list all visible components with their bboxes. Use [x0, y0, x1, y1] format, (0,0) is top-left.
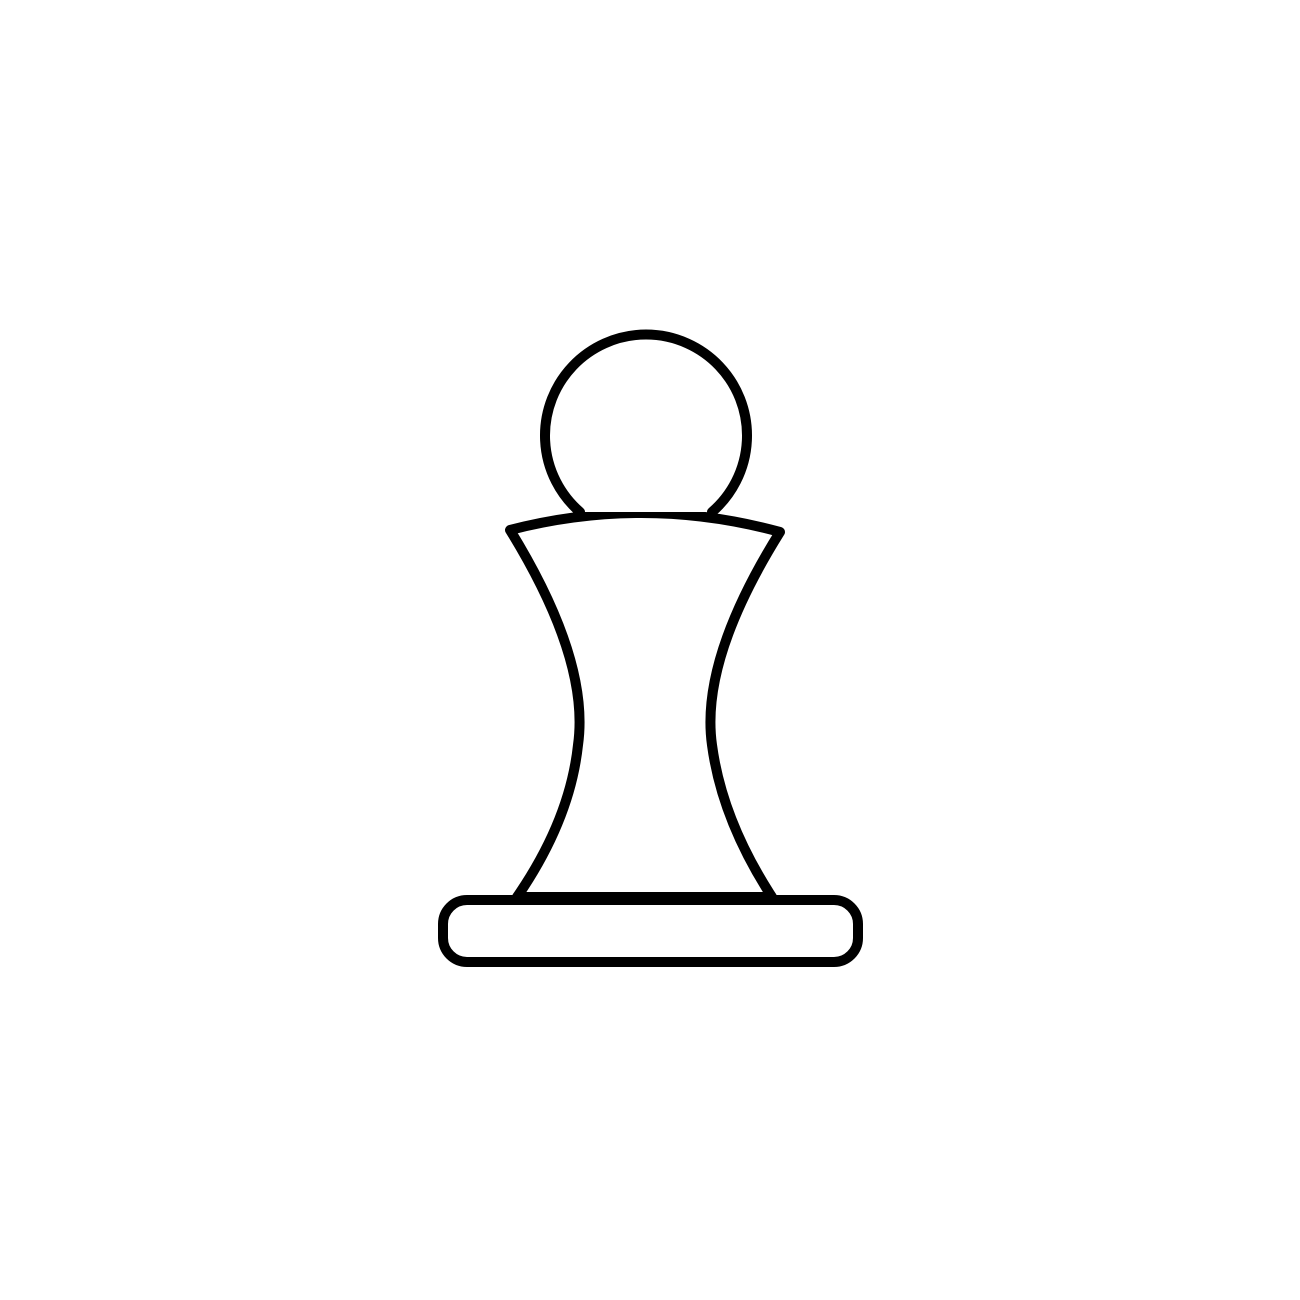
- pawn body: [510, 513, 780, 897]
- pawn base: [443, 900, 858, 962]
- pawn head: [545, 335, 747, 512]
